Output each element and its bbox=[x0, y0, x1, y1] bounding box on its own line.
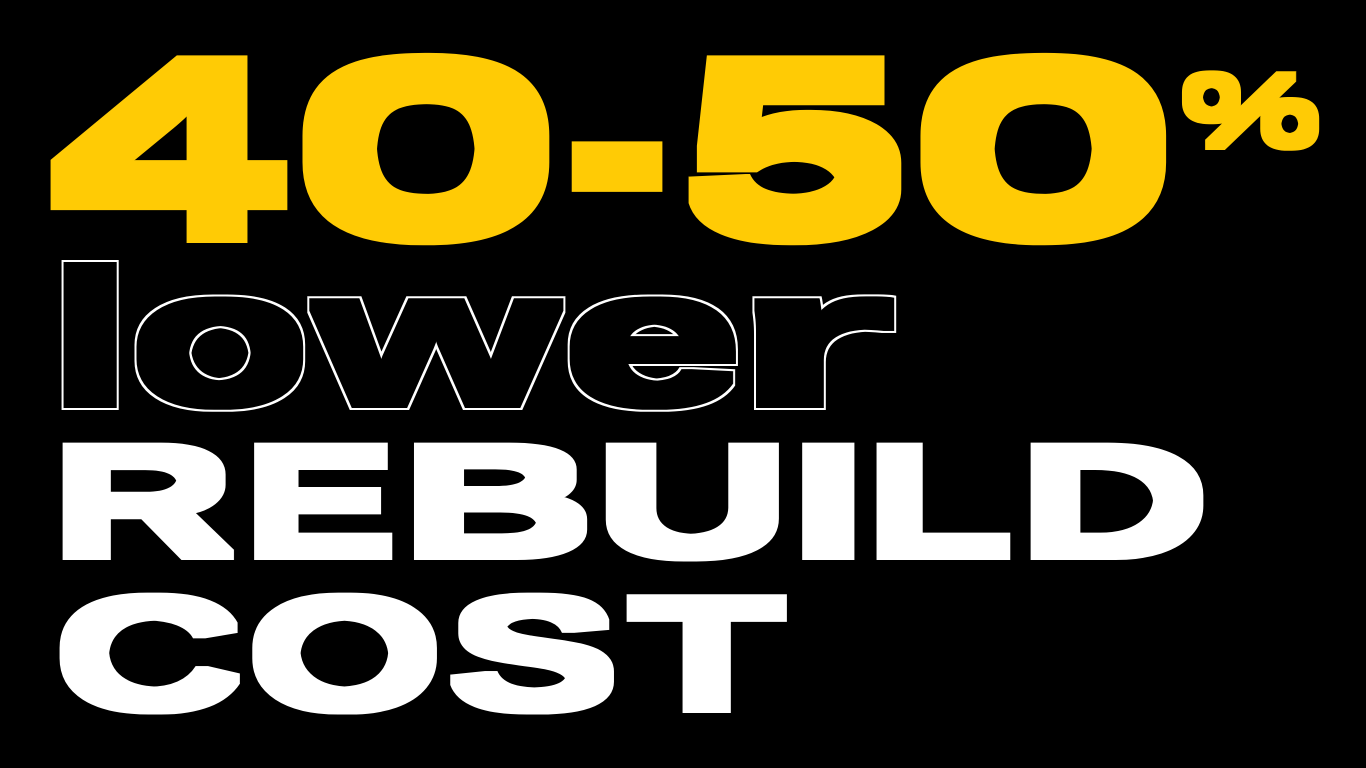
number range bbox=[46, 17, 1185, 280]
word: COST: S bbox=[449, 566, 618, 742]
outlined word: lower bbox=[47, 236, 896, 442]
heading: 40-50 percent bbox=[46, 17, 1321, 280]
number range: 0 bbox=[284, 17, 568, 280]
word: REBUILD: U bbox=[596, 415, 789, 589]
outlined word: lower: w bbox=[313, 236, 560, 442]
word: REBUILD: I bbox=[790, 415, 867, 589]
number range: 5 bbox=[678, 17, 911, 280]
number range: - bbox=[560, 34, 674, 264]
word: COST bbox=[55, 566, 784, 742]
outlined word: lower: r bbox=[732, 236, 896, 442]
word: REBUILD: E bbox=[245, 415, 395, 589]
word: REBUILD bbox=[52, 415, 1208, 589]
outlined word: lower: l bbox=[47, 236, 134, 442]
percent sign: % bbox=[1180, 55, 1321, 167]
number range: 4 bbox=[46, 17, 288, 280]
outlined word: lower: o bbox=[130, 236, 310, 442]
word: REBUILD: B bbox=[402, 415, 593, 589]
word: COST: O bbox=[248, 566, 441, 742]
word: COST: T bbox=[630, 566, 784, 742]
word: COST: C bbox=[55, 566, 241, 742]
number range: 0 bbox=[902, 17, 1185, 280]
outlined word: lower: e bbox=[562, 236, 742, 442]
word: REBUILD: L bbox=[867, 415, 1012, 589]
word: REBUILD: R bbox=[52, 415, 233, 589]
word: REBUILD: D bbox=[1019, 415, 1208, 589]
